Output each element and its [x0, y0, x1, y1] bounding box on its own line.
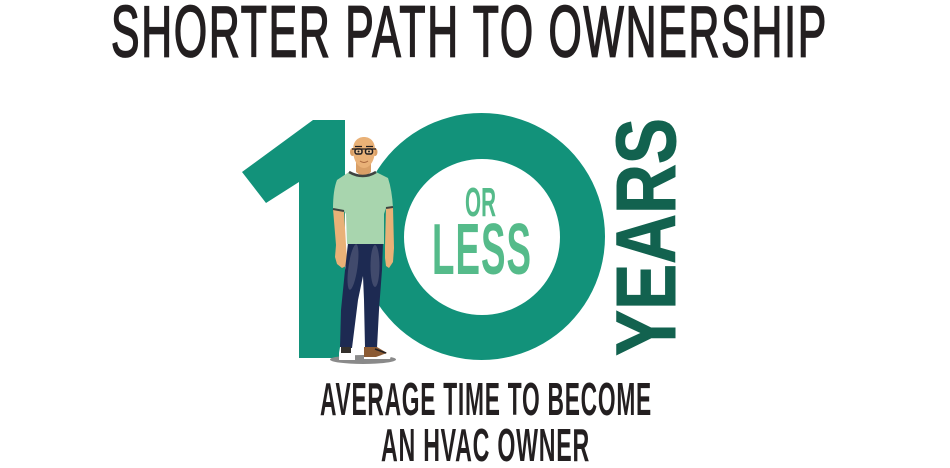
shirt collar — [349, 172, 376, 176]
neck and head — [356, 160, 371, 178]
years label: YEARS — [599, 118, 693, 356]
numeral one — [242, 120, 345, 358]
jeans knee highlights — [345, 244, 361, 290]
arms — [333, 209, 347, 268]
left shoe — [339, 347, 355, 360]
person illustration — [330, 137, 396, 364]
right shoe — [364, 347, 391, 359]
numeral zero ring — [358, 113, 605, 360]
less label: LESS — [432, 210, 532, 290]
t-shirt — [333, 172, 393, 244]
ground shadow — [330, 355, 396, 364]
jeans — [340, 243, 383, 348]
eyebrows and glasses — [352, 146, 376, 149]
or label: OR — [465, 179, 496, 225]
mouth — [360, 161, 368, 162]
sleeve cuffs — [333, 207, 393, 211]
